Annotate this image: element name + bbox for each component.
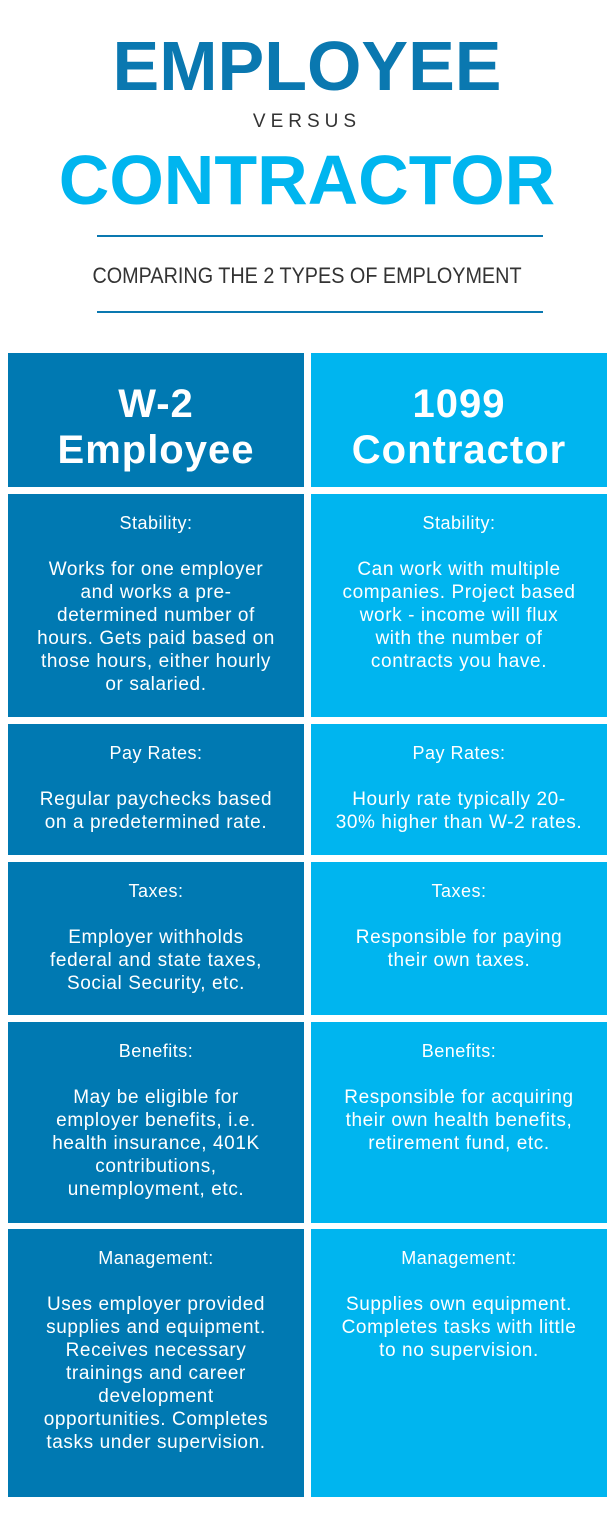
- panel: contractor stability: Can work with multiple: [357, 559, 561, 580]
- panel: employee stability: [8, 494, 304, 717]
- header: 1099 Contractor: Contractor: [352, 428, 566, 472]
- panel: employee management: trainings and career: [66, 1363, 246, 1384]
- panel: contractor stability: Stability:: [422, 513, 496, 533]
- panel: contractor pay rates: 30% higher than W-2 rates.: [336, 812, 582, 833]
- panel: contractor taxes: [311, 862, 607, 1015]
- panel: employee benefits: contributions,: [95, 1156, 217, 1177]
- panel: employee stability: hours. Gets paid based on: [37, 628, 275, 649]
- panel: contractor pay rates: [311, 724, 607, 855]
- panel: contractor benefits: their own health benefits,: [346, 1110, 572, 1131]
- header: W-2 Employee: W-2: [118, 382, 194, 426]
- panel: employee stability: and works a pre-: [80, 582, 232, 603]
- panel: contractor pay rates: Pay Rates:: [412, 743, 506, 763]
- panel: employee taxes: [8, 862, 304, 1015]
- panel: employee management: supplies and equipment.: [46, 1317, 266, 1338]
- subtitle: COMPARING THE 2 TYPES OF EMPLOYMENT: [92, 263, 522, 288]
- panel: contractor taxes: Taxes:: [431, 881, 487, 901]
- panel: contractor stability: companies. Project based: [342, 582, 576, 603]
- panel: employee management: development: [98, 1386, 214, 1407]
- panel: contractor management: [311, 1229, 607, 1497]
- panel: employee taxes: Taxes:: [128, 881, 184, 901]
- panel: contractor stability: [311, 494, 607, 717]
- panel: employee benefits: May be eligible for: [73, 1087, 239, 1108]
- panel: contractor management: Supplies own equipment.: [346, 1294, 572, 1315]
- panel: employee taxes: federal and state taxes,: [50, 950, 262, 971]
- panel: contractor benefits: Benefits:: [422, 1041, 496, 1061]
- panel: employee taxes: Social Security, etc.: [67, 973, 245, 994]
- panel: contractor benefits: [311, 1022, 607, 1223]
- panel: employee benefits: employer benefits, i.e.: [56, 1110, 256, 1131]
- panel: employee taxes: Employer withholds: [68, 927, 244, 948]
- panel: employee benefits: Benefits:: [119, 1041, 193, 1061]
- panel: contractor stability: contracts you have.: [371, 651, 547, 672]
- panel: contractor stability: work - income will flux: [360, 605, 558, 626]
- panel: employee pay rates: on a predetermined rate.: [45, 812, 267, 833]
- panel: contractor taxes: Responsible for paying: [356, 927, 562, 948]
- panel: employee management: [8, 1229, 304, 1497]
- versus: VERSUS: [253, 111, 361, 132]
- panel: employee stability: or salaried.: [105, 674, 207, 695]
- panel: employee stability: Works for one employer: [49, 559, 263, 580]
- panel: contractor benefits: retirement fund, etc.: [368, 1133, 550, 1154]
- panel: employee stability: determined number of: [57, 605, 255, 626]
- header: 1099 Contractor: [311, 353, 607, 487]
- panel: employee benefits: unemployment, etc.: [68, 1179, 244, 1200]
- title: employee: EMPLOYEE: [113, 27, 501, 105]
- panel: contractor benefits: Responsible for acquiring: [344, 1087, 574, 1108]
- panel: contractor taxes: their own taxes.: [388, 950, 530, 971]
- panel: contractor management: to no supervision.: [379, 1340, 539, 1361]
- panel: employee pay rates: [8, 724, 304, 855]
- panel: contractor stability: with the number of: [375, 628, 543, 649]
- panel: employee benefits: health insurance, 401K: [52, 1133, 260, 1154]
- header: W-2 Employee: [8, 353, 304, 487]
- title: contractor: CONTRACTOR: [59, 141, 555, 219]
- panel: employee management: Uses employer provided: [47, 1294, 265, 1315]
- panel: contractor management: Completes tasks with little: [342, 1317, 576, 1338]
- panel: employee stability: those hours, either hourly: [41, 651, 271, 672]
- panel: employee management: opportunities. Completes: [44, 1409, 268, 1430]
- panel: contractor management: Management:: [401, 1248, 517, 1268]
- panel: employee management: tasks under supervision.: [46, 1432, 266, 1453]
- panel: employee pay rates: Pay Rates:: [109, 743, 203, 763]
- panel: contractor pay rates: Hourly rate typically 20-: [352, 789, 566, 810]
- panel: employee management: Management:: [98, 1248, 214, 1268]
- panel: employee management: Receives necessary: [66, 1340, 246, 1361]
- panel: employee pay rates: Regular paychecks based: [40, 789, 272, 810]
- header: W-2 Employee: Employee: [58, 428, 254, 472]
- panel: employee stability: Stability:: [119, 513, 193, 533]
- panel: employee benefits: [8, 1022, 304, 1223]
- header: 1099 Contractor: 1099: [412, 382, 505, 426]
